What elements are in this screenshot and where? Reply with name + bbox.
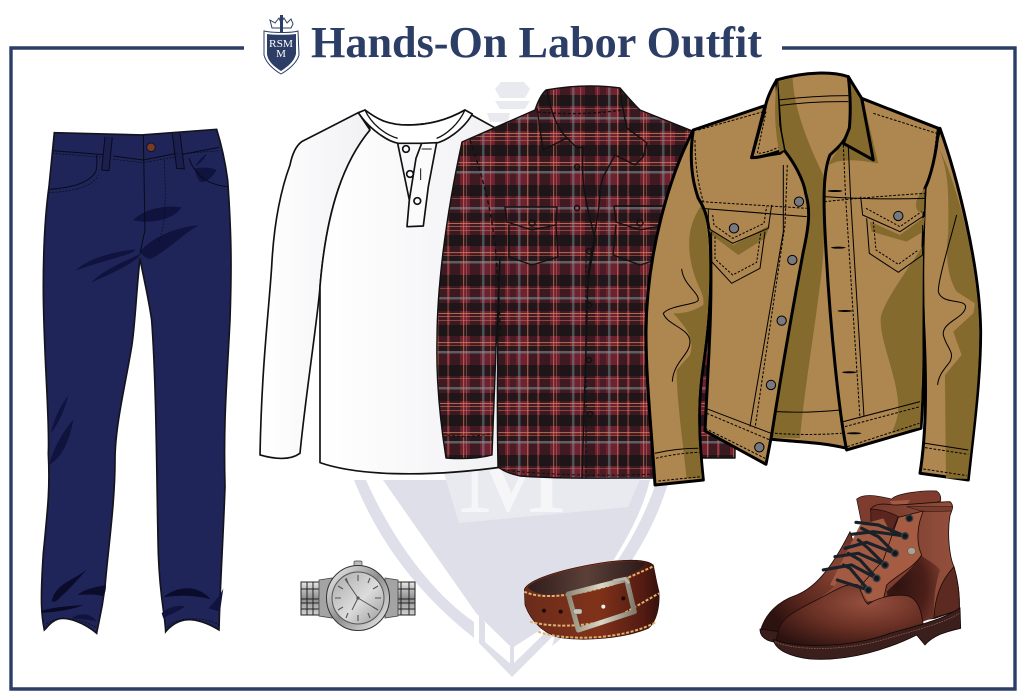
title: Hands-On Labor Outfit	[311, 18, 762, 67]
logo: crest: RSM	[269, 38, 293, 50]
belt holes	[542, 596, 625, 614]
jacket left collar	[752, 80, 784, 158]
back boot sole	[760, 629, 779, 642]
flannel left pocket	[505, 207, 558, 265]
flannel right pocket	[613, 206, 665, 265]
watch case	[326, 561, 390, 630]
jacket left sleeve	[646, 130, 711, 485]
henley placket and buttons	[398, 143, 437, 227]
watermark: shield crest: M	[458, 405, 566, 538]
watch	[301, 561, 415, 630]
jacket right front panel	[824, 98, 938, 450]
jacket right sleeve	[920, 128, 981, 480]
front boot shaft	[850, 502, 959, 625]
watermark: shield crest	[354, 82, 669, 677]
watch lugs	[319, 578, 398, 618]
henley body	[320, 110, 505, 474]
flannel silhouette	[437, 86, 735, 478]
back boot shaft	[857, 491, 941, 532]
henley collar	[358, 110, 472, 143]
boot tongue	[830, 518, 900, 595]
henley shirt	[260, 110, 505, 474]
boot upper vamp	[780, 580, 867, 635]
work boots	[760, 491, 961, 659]
flannel buttons	[574, 164, 592, 416]
logo: crest: M	[276, 48, 286, 60]
flannel collar and placket	[447, 88, 660, 478]
boot eyelets	[865, 515, 913, 593]
boot laces	[823, 522, 905, 590]
boot toe cap	[776, 584, 923, 649]
denim jacket	[646, 73, 981, 485]
boot eyestay	[860, 511, 923, 602]
jacket collar right edge	[843, 77, 873, 160]
jacket left front panel	[691, 106, 809, 464]
jeans	[41, 129, 231, 633]
back boot toe	[761, 532, 867, 632]
jacket lining	[770, 73, 860, 448]
belt	[524, 560, 659, 639]
belt buckle	[568, 578, 634, 630]
watch strap	[301, 582, 415, 615]
boot sole	[773, 608, 961, 659]
flannel shirt	[437, 86, 735, 478]
logo: crest	[264, 15, 299, 74]
henley left sleeve	[260, 113, 370, 459]
